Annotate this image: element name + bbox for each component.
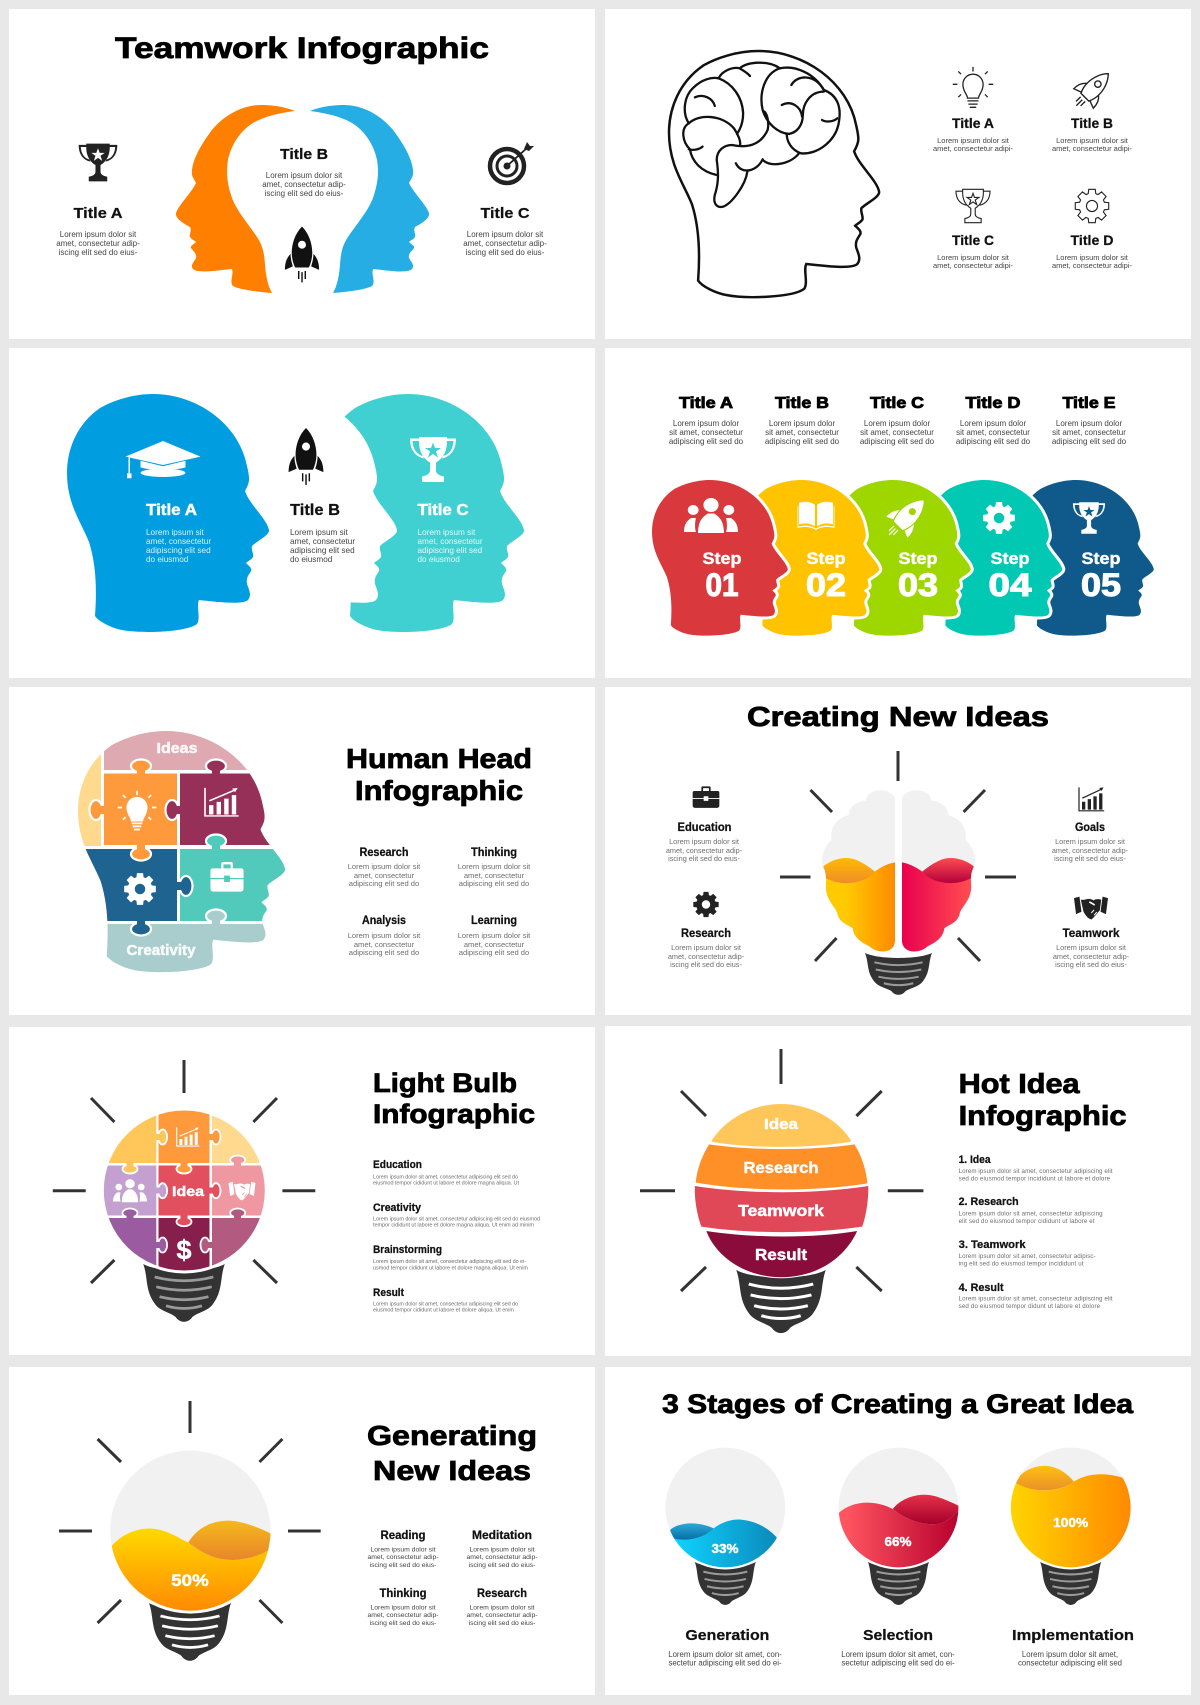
text block: Selection: sectetur adipiscing elit sed do ei-: [841, 1658, 955, 1668]
title: New Ideas: [373, 1455, 531, 1486]
head: step 03: 03: [898, 567, 938, 603]
label: Research: Research: [744, 1160, 818, 1177]
text block: Thinking: Thinking: [471, 847, 517, 859]
text block: Title A: Lorem ipsum dolor sit: [937, 136, 1010, 145]
text block: Research: iscing elit sed do eius-: [469, 1620, 535, 1627]
text block: 1. Idea: Lorem ipsum dolor sit amet, consectetur adipiscing elit: [959, 1168, 1113, 1175]
text block: Generation: sectetur adipiscing elit sed do ei-: [668, 1658, 782, 1668]
text block: Title C: Lorem ipsum dolor sit: [467, 230, 544, 239]
bulb: 66%: [838, 1448, 958, 1570]
panel: five step heads: [605, 348, 1191, 678]
text block: Teamwork: amet, consectetur adip-: [1053, 952, 1130, 961]
text block: Education: eiusmod tempor cididunt ut labore et dolore magna aliqua. Ut: [373, 1180, 519, 1186]
title: [367, 1420, 537, 1486]
bulb layers: [695, 1104, 868, 1277]
text block: Title B: iscing elit sed do eius-: [265, 189, 344, 198]
icon: gear outline: [1075, 189, 1109, 223]
title: Hot Idea: [959, 1068, 1080, 1099]
text block: Title A: adipiscing elit sed do: [669, 437, 744, 446]
icon: people: [113, 1179, 147, 1202]
title: [959, 1068, 1127, 1131]
text block: Meditation: Meditation: [472, 1528, 532, 1542]
text block: Research: Lorem ipsum dolor sit: [671, 943, 741, 952]
text block: Research: [466, 1586, 538, 1627]
head: step 02: Step: [806, 549, 846, 568]
label: Idea: Idea: [172, 1183, 204, 1199]
text block: Title C: iscing elit sed do eius-: [466, 248, 545, 257]
text block: Education: Education: [678, 820, 732, 834]
title: Human Head: [346, 743, 532, 774]
head: step 01: [652, 480, 788, 636]
text block: Research: Lorem ipsum dolor sit: [348, 862, 421, 871]
text block: Title C: adipiscing elit sed: [418, 546, 483, 555]
bulb socket: [736, 1270, 826, 1333]
panel: head with brain outline: [605, 9, 1191, 339]
head: orange facing left: [176, 105, 295, 293]
text block: Result: [373, 1287, 518, 1314]
text block: Title B: Lorem ipsum dolor: [769, 419, 835, 428]
text block: Title A: Lorem ipsum sit: [146, 528, 205, 537]
rays: [640, 1049, 923, 1291]
bulb: 100%: [1010, 1448, 1131, 1570]
label: Idea: Idea: [764, 1116, 799, 1133]
text block: Generation: [668, 1627, 782, 1668]
head: teal with profile cut-out: [195, 394, 524, 632]
text block: Brainstorming: usmod tempor cididunt ut labore et dolore magna aliqua. Ut enim: [373, 1266, 528, 1272]
text block: Title A: Title A: [146, 502, 197, 519]
text block: Research: [348, 847, 421, 888]
text block: Title B: [290, 502, 355, 564]
text block: Title B: do eiusmod: [290, 555, 333, 564]
text block: 3. Teamwork: ing elit sed do eiusmod tempor incididunt ut: [959, 1260, 1084, 1268]
white bulb ring: [101, 1108, 268, 1274]
text block: Research: Research: [681, 926, 731, 940]
rays: [53, 1060, 315, 1283]
icon: handshake: [228, 1182, 256, 1200]
icon: trophy: [79, 144, 117, 181]
text block: Title C: Title C: [480, 205, 530, 222]
brain outline: [683, 63, 840, 207]
icon: rocket outline: [1067, 64, 1118, 115]
text block: Title A: adipiscing elit sed: [146, 546, 211, 555]
text block: Education: [373, 1159, 519, 1186]
text block: Implementation: Lorem ipsum dolor sit amet,: [1022, 1650, 1118, 1659]
text block: Title B: Title B: [1071, 115, 1113, 131]
bulb socket: [143, 1264, 225, 1322]
text block: Generation: Generation: [685, 1627, 769, 1644]
text block: Research: amet, consectetur: [354, 871, 415, 880]
text block: Reading: Reading: [380, 1528, 426, 1542]
text block: Reading: Lorem ipsum dolor sit: [371, 1546, 436, 1554]
icon: light bulb: [118, 791, 156, 829]
text block: Title C: amet, consectetur adip-: [463, 239, 547, 248]
title: [373, 1068, 535, 1129]
icon: chart: [1078, 787, 1104, 811]
text block: Brainstorming: Lorem ipsum dolor sit amet, consectetur adipiscing elit sed do ei-: [373, 1259, 526, 1265]
bulb: 33%: [666, 1448, 785, 1570]
text block: Education: Lorem ipsum dolor sit amet, consectetur adipiscing elit sed do: [373, 1174, 518, 1180]
text block: Title B: Lorem ipsum dolor sit: [266, 171, 343, 180]
text block: Title A: do eiusmod: [146, 555, 189, 564]
text block: Title C: Lorem ipsum dolor sit: [937, 253, 1010, 262]
text block: Education: Education: [373, 1159, 422, 1171]
text block: Title C: Title C: [870, 395, 924, 412]
text block: Creativity: tempor cididunt ut labore et dolore magna aliqua. Ut enim ad minim: [373, 1222, 534, 1228]
icon: target: [490, 142, 534, 183]
text block: Title A: Lorem ipsum dolor sit: [60, 230, 137, 239]
label: 66%: 66%: [884, 1534, 912, 1549]
text block: Brainstorming: Brainstorming: [373, 1244, 442, 1256]
text block: Title D: adipiscing elit sed do: [956, 437, 1031, 446]
label: Result: Result: [755, 1247, 808, 1264]
text block: 4. Result: [959, 1282, 1113, 1310]
text block: Selection: [841, 1627, 955, 1668]
text block: Title B: amet, consectetur: [290, 537, 355, 546]
text block: Thinking: Lorem ipsum dolor sit: [371, 1604, 436, 1612]
text block: Title B: adipiscing elit sed: [290, 546, 355, 555]
panel: facing heads: [9, 348, 595, 678]
text block: Goals: Lorem ipsum dolor sit: [1055, 837, 1125, 846]
text block: 4. Result: 4. Result: [959, 1282, 1004, 1294]
text block: 4. Result: Lorem ipsum dolor sit amet, consectetur adipiscing elit: [959, 1296, 1113, 1302]
text block: Generation: Lorem ipsum dolor sit amet, con-: [668, 1650, 782, 1659]
title: [346, 743, 532, 806]
text block: Education: iscing elit sed do eius-: [668, 854, 740, 863]
text block: Title D: Lorem ipsum dolor: [960, 419, 1026, 428]
text block: Creativity: Creativity: [373, 1202, 422, 1214]
head: step 01: Step: [702, 549, 742, 568]
rays: [59, 1401, 321, 1623]
text block: Title A: amet, consectetur adipi-: [933, 144, 1014, 153]
text block: Title C: sit amet, consectetur: [860, 428, 934, 437]
label: Teamwork: Teamwork: [738, 1203, 824, 1220]
text block: Research: adipiscing elit sed do: [349, 879, 419, 888]
text block: Title C: amet, consectetur: [418, 537, 483, 546]
text block: Title B: [262, 146, 346, 198]
text block: Thinking: adipiscing elit sed do: [459, 879, 529, 888]
text block: Meditation: amet, consectetur adip-: [466, 1554, 538, 1561]
text block: Teamwork: Teamwork: [1062, 926, 1120, 940]
head: step 04: Step: [990, 549, 1030, 568]
text block: Title B: [765, 395, 840, 446]
icon: chart: [204, 788, 239, 817]
text block: Result: Result: [373, 1287, 404, 1299]
text block: Title D: Title D: [966, 395, 1020, 412]
text block: Title D: amet, consectetur adipi-: [1052, 261, 1133, 270]
panel: human head puzzle: [9, 687, 595, 1015]
head outline: [669, 51, 879, 297]
head: step 01: 01: [706, 567, 738, 603]
text block: Title B: Lorem ipsum dolor sit: [1056, 136, 1129, 145]
text block: Analysis: Lorem ipsum dolor sit: [348, 931, 421, 940]
label: 50%: 50%: [171, 1571, 209, 1590]
text block: Thinking: [367, 1586, 439, 1627]
head: step 02: [744, 480, 879, 636]
text block: Title C: [463, 205, 547, 257]
text block: Title A: [933, 115, 1014, 153]
text block: Meditation: Lorem ipsum dolor sit: [470, 1546, 535, 1554]
text block: 1. Idea: [959, 1154, 1113, 1182]
head: step 04: 04: [988, 567, 1032, 603]
text block: 4. Result: sed do eiusmod tempor didunt ut labore et dolore: [959, 1303, 1101, 1310]
text block: Title C: Lorem ipsum dolor: [864, 419, 930, 428]
icon: graduation cap: [126, 441, 200, 478]
text block: 3. Teamwork: Lorem ipsum dolor sit amet, consectetur adipisc-: [959, 1253, 1096, 1260]
text block: Thinking: amet, consectetur adip-: [367, 1612, 439, 1619]
text block: Reading: amet, consectetur adip-: [367, 1554, 439, 1561]
text block: Brainstorming: [373, 1244, 528, 1272]
text block: Title D: Title D: [1070, 232, 1114, 248]
brain bulb: [818, 790, 979, 957]
panel: creating new ideas: [605, 687, 1191, 1015]
text block: 2. Research: elit sed do eiusmod tempor cididunt ut labore et: [959, 1218, 1095, 1225]
text block: Title B: sit amet, consectetur: [765, 428, 839, 437]
icon: gear: [693, 892, 719, 917]
text block: Learning: adipiscing elit sed do: [459, 948, 529, 957]
text block: Title C: [860, 395, 935, 446]
text block: Learning: Lorem ipsum dolor sit: [458, 931, 531, 940]
label: 33%: 33%: [712, 1541, 739, 1556]
text block: 3. Teamwork: [959, 1239, 1096, 1268]
title: Infographic: [373, 1099, 535, 1129]
head: step 05: Step: [1082, 549, 1120, 568]
title: Creating New Ideas: [747, 701, 1049, 732]
text block: Title A: Title A: [74, 205, 123, 222]
text block: Learning: amet, consectetur: [464, 940, 525, 949]
text block: Title B: Title B: [280, 146, 328, 163]
text block: Title C: Title C: [418, 502, 469, 519]
text block: Implementation: consectetur adipiscing elit sed: [1018, 1658, 1122, 1668]
text block: Selection: Selection: [863, 1627, 933, 1644]
text block: Title A: Title A: [679, 395, 733, 412]
text block: Research: Lorem ipsum dolor sit: [470, 1604, 535, 1612]
puzzle head: [78, 731, 286, 972]
label: dollar sign: $: [176, 1235, 192, 1265]
text block: Title C: Title C: [952, 232, 994, 248]
text block: Title D: [956, 395, 1031, 446]
text block: Title A: [56, 205, 140, 257]
head: step 04: [926, 480, 1062, 636]
text block: Analysis: adipiscing elit sed do: [349, 948, 419, 957]
text block: Title A: Lorem ipsum dolor: [673, 419, 739, 428]
text block: Title D: [1052, 232, 1133, 270]
text block: Learning: [458, 915, 531, 957]
text block: Creativity: Lorem ipsum dolor sit amet, consectetur adipiscing elit sed do eiusmod: [373, 1216, 540, 1222]
text block: Title A: Title A: [952, 115, 994, 131]
text block: Goals: iscing elit sed do eius-: [1054, 854, 1126, 863]
text block: 2. Research: Lorem ipsum dolor sit amet, consectetur adipiscing: [959, 1210, 1103, 1218]
panel: light bulb puzzle: [9, 1027, 595, 1355]
text block: Title E: [1052, 395, 1127, 446]
icon: light bulb outline: [953, 67, 993, 107]
text block: Reading: iscing elit sed do eius-: [370, 1562, 436, 1569]
text block: Goals: Goals: [1075, 820, 1105, 834]
head: blue facing right: [310, 105, 429, 293]
text block: Learning: Learning: [471, 915, 517, 927]
text block: Title C: [418, 502, 483, 564]
text block: 2. Research: 2. Research: [959, 1196, 1019, 1208]
text block: Goals: [1052, 820, 1129, 863]
text block: Title B: adipiscing elit sed do: [765, 437, 840, 446]
icon: trophy outline: [956, 189, 990, 223]
text block: Result: eiusmod tempor cididunt ut labore et dolore aliqua. Ut enim: [373, 1308, 514, 1314]
head: step 02: 02: [806, 567, 846, 603]
head: step 05: 05: [1081, 567, 1121, 603]
text block: Title D: Lorem ipsum dolor sit: [1056, 253, 1129, 262]
panel: three stages: [605, 1367, 1191, 1695]
text block: Title C: adipiscing elit sed do: [860, 437, 935, 446]
text block: Title E: sit amet, consectetur: [1052, 428, 1126, 437]
icon: rocket: [285, 226, 319, 282]
panel: hot idea: [605, 1026, 1191, 1356]
text block: Title E: Lorem ipsum dolor: [1056, 419, 1122, 428]
bulb socket: [149, 1603, 231, 1661]
text block: Thinking: amet, consectetur: [464, 871, 525, 880]
text block: Title C: Lorem ipsum sit: [418, 528, 476, 537]
text block: Title A: iscing elit sed do eius-: [59, 248, 138, 257]
text block: Thinking: Lorem ipsum dolor sit: [458, 862, 531, 871]
panel: teamwork infographic: [9, 9, 595, 339]
text block: Title C: do eiusmod: [418, 555, 460, 564]
icon: rocket: [289, 428, 323, 485]
text block: Reading: [367, 1528, 439, 1569]
text block: Result: Lorem ipsum dolor sit amet, consectetur adipiscing elit sed do: [373, 1302, 518, 1308]
text block: Title A: [146, 502, 211, 564]
icon: briefcase: [210, 862, 244, 892]
title: Teamwork Infographic: [115, 32, 489, 65]
text block: Title B: [1052, 115, 1133, 153]
text block: Implementation: [1012, 1627, 1134, 1668]
head: blue: [67, 394, 269, 632]
text block: Thinking: [458, 847, 531, 888]
icon: trophy: [410, 437, 456, 482]
title: Infographic: [959, 1100, 1127, 1131]
text block: Teamwork: iscing elit sed do eius-: [1055, 960, 1127, 969]
text block: Title B: Lorem ipsum sit: [290, 528, 349, 537]
text block: Title E: adipiscing elit sed do: [1052, 437, 1127, 446]
text block: Meditation: iscing elit sed do eius-: [469, 1562, 535, 1569]
text block: Education: Lorem ipsum dolor sit: [669, 837, 739, 846]
head: step 05: [1018, 480, 1154, 636]
text block: 1. Idea: sed do eiusmod tempor incididunt ut labore et dolore: [959, 1176, 1111, 1182]
bulb sockets: [695, 1562, 1101, 1605]
panel: generating new ideas: [9, 1367, 595, 1695]
title: 3 Stages of Creating a Great Idea: [662, 1389, 1134, 1419]
text block: Title A: amet, consectetur adip-: [56, 239, 140, 248]
text block: Implementation: Implementation: [1012, 1627, 1134, 1644]
text block: Research: amet, consectetur adip-: [668, 952, 745, 961]
title: Infographic: [355, 775, 523, 806]
title: Light Bulb: [373, 1068, 517, 1098]
text block: Title A: amet, consectetur: [146, 537, 211, 546]
text block: Teamwork: [1053, 926, 1130, 969]
head: step 03: [835, 480, 971, 636]
text block: Title B: amet, consectetur adipi-: [1052, 144, 1133, 153]
bulb 50%: [107, 1448, 273, 1614]
text block: Research: [668, 926, 745, 969]
text block: Title B: Title B: [290, 502, 340, 519]
text block: Title B: amet, consectetur adip-: [262, 180, 346, 189]
text block: Research: Research: [360, 847, 408, 859]
text block: Research: Research: [477, 1586, 527, 1600]
text block: Creativity: [373, 1202, 540, 1228]
text block: Teamwork: Lorem ipsum dolor sit: [1056, 943, 1126, 952]
icon: gear: [124, 873, 156, 905]
text block: Research: amet, consectetur adip-: [466, 1612, 538, 1619]
text block: Title B: Title B: [775, 395, 829, 412]
text block: Analysis: Analysis: [362, 915, 406, 927]
title: Generating: [367, 1420, 537, 1451]
icon: chart: [176, 1127, 199, 1147]
text block: 3. Teamwork: 3. Teamwork: [959, 1239, 1026, 1251]
text block: Title A: [669, 395, 744, 446]
puzzle bulb: [100, 1105, 268, 1273]
text block: Title A: sit amet, consectetur: [669, 428, 743, 437]
head: step 03: Step: [898, 549, 938, 568]
text block: Analysis: amet, consectetur: [354, 940, 415, 949]
text block: Thinking: iscing elit sed do eius-: [370, 1620, 436, 1627]
text block: Title C: amet, consectetur adipi-: [933, 261, 1014, 270]
icon: briefcase: [693, 786, 719, 808]
bulb socket: [865, 953, 932, 995]
rays: [780, 751, 1016, 961]
label: 100%: 100%: [1053, 1515, 1089, 1530]
text block: Title D: sit amet, consectetur: [956, 428, 1030, 437]
text block: Meditation: [466, 1528, 538, 1569]
text block: Title C: [933, 232, 1014, 270]
text block: Selection: Lorem ipsum dolor sit amet, con-: [841, 1650, 955, 1659]
label: Creativity: Creativity: [126, 942, 196, 959]
text block: Research: iscing elit sed do eius-: [670, 960, 742, 969]
label: Ideas: Ideas: [156, 740, 198, 757]
text block: 1. Idea: 1. Idea: [959, 1154, 991, 1166]
text block: Education: amet, consectetur adip-: [666, 846, 743, 855]
text block: Analysis: [348, 915, 421, 957]
text block: Education: [666, 820, 743, 863]
text block: Goals: amet, consectetur adip-: [1052, 846, 1129, 855]
text block: Thinking: Thinking: [380, 1586, 426, 1600]
text block: Title E: Title E: [1062, 395, 1116, 412]
icon: handshake: [1074, 897, 1108, 919]
text block: 2. Research: [959, 1196, 1103, 1225]
